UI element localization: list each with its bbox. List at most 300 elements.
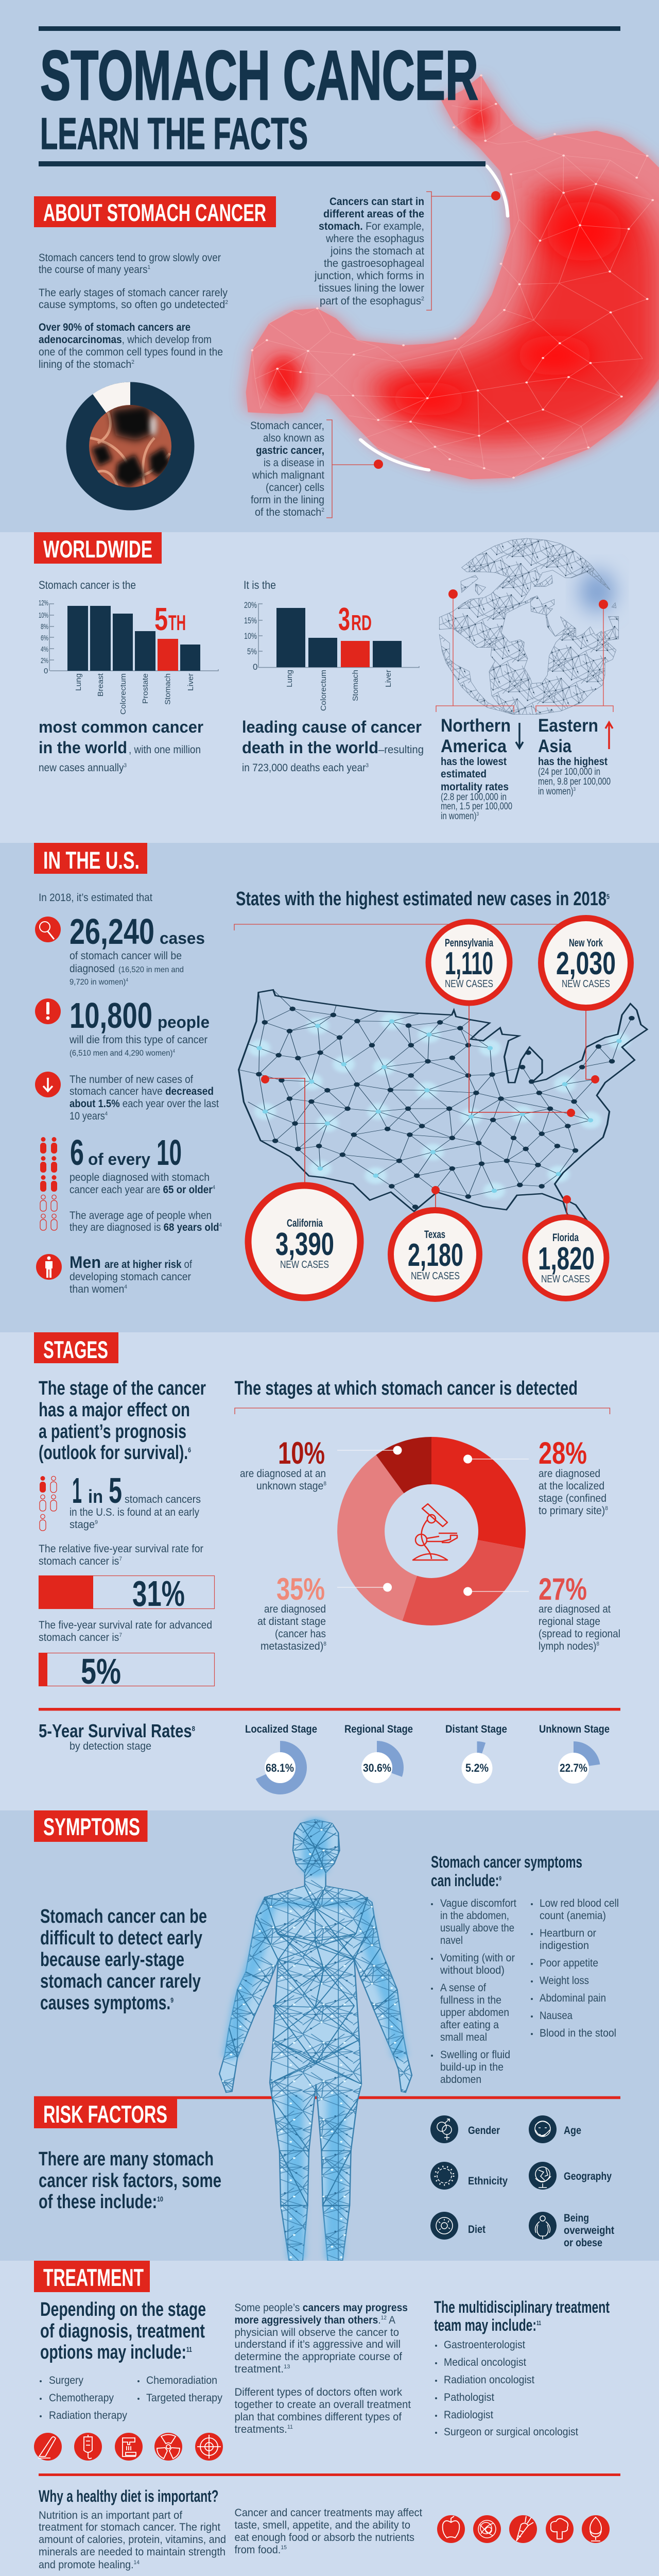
label: 10% unknown stage: are diagnosed at an — [240, 1468, 326, 1480]
callout: cancers can start in different areas: joins the stomach at — [330, 245, 424, 257]
callout: cancers can start in different areas: 2 — [421, 296, 424, 302]
heading: risk factors — [34, 2096, 177, 2128]
text: treatments affect eating — [235, 2507, 422, 2556]
stat: men at higher risk: developing stomach cancer — [70, 1271, 191, 1283]
chart: most common cancers: TH — [168, 611, 186, 635]
text: nutrition importance: 14 — [134, 2560, 140, 2566]
callout: Pennsylvania: NEW CASES — [445, 978, 493, 990]
callout: California: 3,390 — [275, 1227, 334, 1262]
list: symptoms column 1: Vomiting (with or — [440, 1952, 515, 1964]
text: aggressive cancers: 11 — [287, 2424, 293, 2430]
text block: intro: 2 — [131, 359, 134, 365]
map: network of the United States — [239, 990, 647, 1219]
icon: geography: Geography — [564, 2171, 612, 2182]
stat: cases decreased: 4 — [105, 1111, 108, 1117]
heading: treatment — [34, 2261, 150, 2292]
heading: in the U.S. — [34, 843, 147, 874]
text block: northern america: in women) — [441, 811, 486, 822]
text block: intro: one of the common cell types found in the — [39, 346, 223, 358]
icon: ethnicity — [430, 2162, 508, 2190]
chart: unknown 22.7% — [539, 1723, 610, 1789]
label: 28% localized: 8 — [605, 1505, 608, 1512]
stat: 1 in 5: in — [88, 1486, 103, 1507]
chart: regional 30.6%: Regional Stage — [344, 1723, 413, 1735]
list: symptoms column 2: Nausea — [540, 2010, 573, 2022]
text block: leading cause of death: 3 — [366, 762, 369, 769]
text: treatments affect eating: from food. — [235, 2544, 283, 2556]
text block: northern america: America — [441, 736, 507, 756]
list: symptoms column 1: navel — [440, 1935, 463, 1946]
chart: detection stage donut — [337, 1437, 529, 1625]
heading: symptoms list: 9 — [499, 1875, 501, 1882]
text block: intro: Over 90% of stomach cancers are — [39, 321, 190, 333]
callout: Florida — [525, 1217, 606, 1298]
chart: leading causes of cancer death: It is the — [244, 579, 276, 591]
stat: cases decreased: stomach cancer have decreased — [70, 1086, 214, 1097]
heading: treatment: TREATMENT — [43, 2264, 144, 2291]
heading: 5-year survival rates: 5-Year Survival Rates — [39, 1720, 227, 1741]
text block: northern america: Northern — [441, 716, 511, 736]
icon: geography — [529, 2162, 612, 2190]
text: aggressive cancers — [235, 2302, 411, 2435]
label: 27% regional: are diagnosed at — [539, 1603, 611, 1615]
stat: 26,240 cases: cases — [160, 929, 205, 947]
stat: men at higher risk: Men — [70, 1253, 101, 1272]
label: 28% localized — [539, 1436, 608, 1517]
callout: New York: New York — [569, 937, 603, 949]
callout: cancers can start in different areas: tissues lining the lower — [319, 282, 424, 294]
list: treatment team: 11 — [536, 2319, 541, 2327]
chart: leading causes of cancer death — [244, 579, 419, 711]
icon: microscope — [413, 1504, 457, 1560]
top rule — [39, 26, 620, 31]
icon: diet: Diet — [468, 2224, 485, 2235]
chart: 90% adenocarcinoma donut with tissue — [66, 382, 195, 510]
text: risk factors intro: 10 — [157, 2195, 163, 2203]
decorative bracket — [235, 1408, 610, 1414]
stat: 6 of every 10 with people icons: cancer each year are 65 or older — [70, 1184, 218, 1196]
text block: most common cancer: 3 — [124, 762, 127, 769]
chart: most common cancers: Breast — [96, 673, 105, 697]
list: symptoms column 1: without blood) — [440, 1964, 505, 1976]
callout: cancers can start in different areas: Cancers can start in — [330, 196, 424, 208]
callout: Pennsylvania: 1,110 — [445, 946, 493, 981]
text: treatment options — [40, 2299, 206, 2363]
icon: diet — [430, 2212, 485, 2240]
chart: most common cancers: Stomach cancer is the — [39, 579, 136, 591]
list: symptoms column 1: in the abdomen, — [440, 1910, 509, 1922]
text block: eastern asia: men, 9.8 per 100,000 — [538, 776, 611, 787]
chart: most common cancers: 6% — [41, 634, 48, 642]
stat: men at higher risk — [36, 1253, 192, 1295]
text block: eastern asia: (24 per 100,000 in — [538, 767, 600, 777]
text block: intro: adenocarcinomas, which develop from — [39, 334, 212, 346]
label: 28% localized: to primary site) — [539, 1505, 610, 1517]
heading: stages: STAGES — [43, 1336, 108, 1363]
icon: age — [529, 2115, 581, 2143]
heading: worldwide: WORLDWIDE — [43, 535, 152, 563]
callout: Texas: Texas — [424, 1229, 445, 1241]
stat: men at higher risk: than women — [70, 1283, 128, 1295]
icon: broccoli — [546, 2515, 574, 2543]
text block: northern america — [441, 716, 512, 822]
label: 27% regional: lymph nodes) — [539, 1640, 603, 1652]
stat: 6 of every 10 with people icons: 10 — [157, 1132, 182, 1173]
subtitle: LEARN THE FACTS — [40, 109, 308, 159]
text block: intro — [39, 252, 228, 370]
list: treatment team: Medical oncologist — [444, 2357, 526, 2368]
heading: symptoms: SYMPTOMS — [43, 1813, 140, 1840]
chart: leading causes of cancer death: Liver — [384, 670, 393, 687]
label: 35% distant — [257, 1572, 326, 1652]
text: treatment options: of diagnosis, treatment — [40, 2320, 205, 2342]
heading: symptoms list: Stomach cancer symptoms — [431, 1853, 582, 1871]
chart: distant 5.2%: 5.2% — [465, 1761, 489, 1774]
chart: most common cancers: 4% — [41, 645, 48, 654]
text: aggressive cancers: Some people’s cancers may progress — [235, 2302, 408, 2314]
callout: Texas: NEW CASES — [411, 1270, 460, 1282]
text block: intro: lining of the stomach — [39, 359, 138, 370]
icon: being overweight: overweight — [564, 2225, 614, 2236]
text block: leading cause of death: –resulting — [378, 744, 424, 756]
list: treatment options: Targeted therapy — [146, 2392, 222, 2404]
stat: men at higher risk: are at higher risk of — [105, 1259, 192, 1270]
list: symptoms column 2 — [531, 1897, 619, 2039]
stat: 5% advanced survival: The five-year survival rate for advanced — [39, 1619, 212, 1631]
callout: gastric cancer definition: Stomach cancer, — [250, 420, 324, 432]
chart: leading causes of cancer death: 3 — [338, 602, 350, 637]
stat: 6 of every 10 with people icons: The average age of people when — [70, 1210, 212, 1222]
text block: intro: 1 — [148, 264, 150, 270]
text: nutrition importance: Nutrition is an important part of — [39, 2510, 182, 2521]
text: aggressive cancers: together to create an overall treatment — [235, 2399, 411, 2411]
text block: northern america: has the lowest — [441, 756, 507, 768]
chart: most common cancers: Stomach — [164, 673, 172, 705]
label: 28% localized: stage (confined — [539, 1493, 606, 1504]
text: stage effect on prognosis: 6 — [188, 1446, 191, 1454]
illustration: network globe — [436, 538, 619, 715]
chart: leading causes of cancer death: 0 — [253, 662, 257, 672]
text: treatment options: Depending on the stage — [40, 2299, 206, 2320]
text: difficult to detect: difficult to detect early — [40, 1927, 202, 1949]
list: symptoms column 1: small meal — [440, 2031, 487, 2043]
text: nutrition importance: amount of calories, protein, vitamins, and — [39, 2534, 226, 2546]
list: symptoms column 1: usually above the — [440, 1922, 514, 1934]
callout: gastric cancer definition — [250, 420, 383, 518]
text block: northern america: mortality rates — [441, 781, 509, 793]
stat: 1 in 5: 1 — [72, 1470, 82, 1511]
chart: leading causes of cancer death: 15% — [244, 616, 257, 625]
label: 27% regional: 27% — [539, 1572, 587, 1606]
text: stage effect on prognosis: (outlook for survival). — [39, 1442, 238, 1464]
illustration: glowing stomach — [246, 75, 659, 479]
chart: regional 30.6% — [344, 1723, 413, 1789]
text block: eastern asia: 3 — [574, 787, 576, 792]
chart: most common cancers: 8% — [41, 622, 48, 631]
panel: worldwide — [0, 532, 659, 843]
heading: in the U.S.: IN THE U.S. — [43, 846, 140, 874]
callout: California: California — [287, 1217, 323, 1229]
chart: leading causes of cancer death: Colorectum — [319, 670, 328, 711]
chart: most common cancers: 5 — [154, 602, 168, 637]
divider rule — [34, 2096, 620, 2099]
text block: leading cause of death — [242, 718, 424, 774]
stat: cases decreased: about 1.5% each year over the last — [70, 1098, 219, 1110]
stat: 31% five-year survival: The relative five-year survival rate for — [39, 1543, 203, 1555]
chart: most common cancers: Liver — [186, 673, 195, 691]
list: symptoms column 2: Low red blood cell — [540, 1897, 619, 1909]
chart: most common cancers: Prostate — [141, 673, 150, 704]
callout: gastric cancer definition: is a disease in — [264, 457, 324, 469]
icon: gender: Gender — [468, 2125, 500, 2137]
stat: 26,240 cases: 26,240 — [70, 911, 154, 952]
chart: most common cancers: 10% — [39, 611, 48, 620]
callout: New York: NEW CASES — [562, 978, 610, 990]
text block: eastern asia: Eastern — [538, 716, 598, 736]
stat: 6 of every 10 with people icons — [40, 1132, 222, 1233]
heading: about stomach cancer — [34, 196, 276, 227]
callout: gastric cancer definition: also known as — [263, 432, 324, 444]
text: aggressive cancers: treatment. — [235, 2363, 283, 2375]
text: stage effect on prognosis: a patient’s prognosis — [39, 1421, 186, 1443]
chart: leading causes of cancer death: 20% — [244, 600, 257, 610]
list: treatment team: team may include: — [434, 2316, 578, 2334]
text: difficult to detect: Stomach cancer can be — [40, 1906, 207, 1927]
stat: 5% advanced survival: 7 — [119, 1632, 122, 1638]
label: 28% localized: are diagnosed — [539, 1468, 600, 1480]
label: 10% unknown stage: 8 — [323, 1481, 326, 1487]
stat: men at higher risk: 4 — [124, 1284, 127, 1290]
text block: most common cancer: in the world — [39, 738, 127, 757]
callout: cancers can start in different areas: where the esophagus — [325, 233, 424, 245]
list: symptoms column 1: A sense of — [440, 1982, 486, 1994]
list: treatment team: Pathologist — [444, 2392, 494, 2403]
list: symptoms column 2: count (anemia) — [540, 1910, 606, 1922]
list: symptoms column 2: Poor appetite — [540, 1957, 598, 1969]
stat: 6 of every 10 with people icons: 4 — [213, 1184, 215, 1191]
callout: California: NEW CASES — [280, 1259, 329, 1270]
callout: Pennsylvania — [428, 922, 510, 1003]
list: symptoms column 1: upper abdomen — [440, 2007, 509, 2019]
lower rule — [39, 161, 485, 166]
text block: northern america: 3 — [477, 811, 479, 817]
text: treatments affect eating: Cancer and cancer treatments may affect — [235, 2507, 422, 2519]
text block: intro: 2 — [225, 299, 228, 306]
stat: 10,800 people: (6,510 men and 4,290 women) — [70, 1049, 182, 1058]
callout: Pennsylvania: Pennsylvania — [445, 937, 493, 949]
label: 35% distant: at distant stage — [257, 1616, 326, 1628]
heading: 5-year survival rates: by detection stage — [70, 1740, 151, 1752]
text: difficult to detect: causes symptoms. — [40, 1992, 215, 2014]
list: symptoms column 1: build-up in the — [440, 2061, 504, 2073]
text block: leading cause of death: in 723,000 deaths each year — [242, 762, 378, 774]
label: 10% unknown stage: unknown stage — [256, 1480, 329, 1492]
list: symptoms column 1: fullness in the — [440, 1994, 501, 2006]
text block: most common cancer: , with one million — [129, 744, 201, 756]
stat: 6 of every 10 with people icons: they are diagnosed is 68 years old — [70, 1222, 226, 1233]
text block: eastern asia: has the highest — [538, 756, 608, 768]
chart: most common cancers: 2% — [41, 656, 48, 665]
label: 28% localized: 28% — [539, 1436, 587, 1470]
label: 35% distant: are diagnosed — [264, 1603, 326, 1615]
heading: worldwide — [34, 532, 162, 564]
chart: most common cancers: 0 — [44, 667, 48, 675]
text: treatments affect eating: taste, smell, appetite, and the ability to — [235, 2519, 410, 2531]
list: symptoms column 1: Swelling or fluid — [440, 2049, 510, 2061]
arrow: highest rates up — [605, 722, 613, 749]
stat: 26,240 cases: diagnosed — [70, 963, 115, 975]
text block: intro: The early stages of stomach cancer rarely — [39, 287, 228, 299]
stat: 26,240 cases: of stomach cancer will be — [70, 950, 182, 962]
chart: leading causes of cancer death: 10% — [244, 631, 257, 641]
chart: most common cancers: Colorectum — [119, 673, 128, 715]
stat: 31% five-year survival: 7 — [119, 1556, 122, 1562]
callout: cancers can start in different areas — [314, 191, 500, 310]
divider rule — [39, 1708, 620, 1710]
stat: 1 in 5: stage — [70, 1519, 96, 1531]
heading: about stomach cancer: ABOUT STOMACH CANCER — [43, 199, 266, 226]
callout: gastric cancer definition: (cancer) cells — [266, 482, 324, 494]
callout: Florida: Florida — [552, 1232, 579, 1244]
callout: cancers can start in different areas: stomach. For example, — [319, 221, 424, 232]
text: difficult to detect: because early-stage — [40, 1949, 184, 1971]
icon: chemotherapy IV bag — [74, 2433, 102, 2461]
stat: 10,800 people: people — [158, 1013, 210, 1031]
callout: Texas: 2,180 — [408, 1238, 463, 1273]
callout: gastric cancer definition: of the stomach — [255, 506, 326, 518]
stat: 1 in 5: 5 — [109, 1470, 122, 1511]
text: risk factors intro — [39, 2148, 221, 2213]
chart: distant 5.2%: Distant Stage — [445, 1723, 507, 1735]
list: symptoms column 2: Heartburn or — [540, 1927, 596, 1939]
list: treatment options — [40, 2375, 222, 2421]
text: difficult to detect: stomach cancer rarely — [40, 1971, 201, 1992]
callout: cancers can start in different areas: different areas of the — [323, 208, 424, 220]
heading: 5-year survival rates: 8 — [192, 1724, 195, 1733]
stat: 10,800 people: 4 — [172, 1048, 175, 1054]
callout: New York — [541, 918, 631, 1008]
stat: cases decreased: 10 years — [70, 1110, 111, 1122]
label: 35% distant: 8 — [323, 1641, 326, 1647]
list: treatment options: Radiation therapy — [49, 2410, 127, 2421]
list: symptoms column 2: Weight loss — [540, 1975, 589, 1987]
text: aggressive cancers: 13 — [284, 2364, 290, 2370]
icon: being overweight: or obese — [564, 2237, 602, 2249]
stat: 1 in 5: in the U.S. is found at an early — [70, 1506, 199, 1518]
icon: gender — [430, 2115, 500, 2143]
list: symptoms column 1: abdomen — [440, 2074, 481, 2086]
callout: gastric cancer definition: which malignant — [252, 469, 324, 481]
text block: northern america: estimated — [441, 768, 487, 780]
callout: Texas — [391, 1210, 479, 1299]
label: 27% regional: 8 — [597, 1641, 599, 1647]
chart: most common cancers: 12% — [39, 599, 48, 607]
text: nutrition importance: treatment for stomach cancer. The right — [39, 2521, 220, 2533]
callout: Florida: NEW CASES — [541, 1274, 590, 1285]
callout: Florida: 1,820 — [538, 1241, 595, 1277]
text: stage effect on prognosis — [39, 1378, 206, 1464]
list: treatment team: Radiologist — [444, 2409, 493, 2421]
text block: most common cancer: new cases annually — [39, 762, 133, 774]
text: aggressive cancers: Different types of doctors often work — [235, 2386, 402, 2398]
heading: states with highest new cases: 5 — [606, 892, 610, 901]
text block: most common cancer: most common cancer — [39, 718, 203, 736]
text: risk factors intro: There are many stomach — [39, 2148, 214, 2170]
stat: 31% five-year survival: stomach cancer is — [39, 1555, 126, 1567]
list: symptoms column 1 — [431, 1897, 516, 2086]
list: treatment team: Surgeon or surgical oncologist — [444, 2426, 578, 2438]
icon: ethnicity: Ethnicity — [468, 2175, 508, 2187]
stat: 26,240 cases: (16,520 in men and — [118, 965, 184, 974]
panel: in the U.S. — [0, 843, 659, 1332]
illustration: network human body — [219, 1820, 412, 2261]
text block: leading cause of death: death in the world — [242, 738, 378, 757]
stat: 6 of every 10 with people icons: 4 — [219, 1222, 222, 1228]
text: aggressive cancers: understand if it’s aggressive and will — [235, 2338, 401, 2350]
heading: healthy diet: Why a healthy diet is important? — [39, 2487, 218, 2505]
label: 35% distant: 35% — [276, 1572, 325, 1606]
text block: leading cause of death: leading cause of cancer — [242, 718, 422, 736]
divider rule — [39, 2473, 620, 2476]
icon: apple — [437, 2515, 465, 2543]
panel: hero and about stomach cancer — [0, 0, 659, 532]
label: 27% regional: regional stage — [539, 1616, 600, 1628]
stat: 5% advanced survival: 5% — [81, 1651, 121, 1691]
text: aggressive cancers: treatments. — [235, 2424, 289, 2435]
text: risk factors intro: of these include: — [39, 2191, 194, 2213]
chart: most common cancers — [39, 579, 218, 715]
icon: egg — [582, 2515, 610, 2543]
chart: localized 68.1% — [245, 1723, 317, 1789]
stat: 1 in 5: 9 — [95, 1519, 98, 1526]
chart: localized 68.1%: 68.1% — [266, 1761, 294, 1774]
list: symptoms column 2: Blood in the stool — [540, 2027, 616, 2039]
chart: leading causes of cancer death: RD — [351, 611, 372, 635]
chart: distant 5.2% — [445, 1723, 507, 1789]
text: treatments affect eating: eat enough food or absorb the nutrients — [235, 2532, 414, 2544]
chart: unknown 22.7%: 22.7% — [560, 1761, 587, 1774]
text: difficult to detect: 9 — [170, 1996, 174, 2004]
list: symptoms column 2: indigestion — [540, 1940, 589, 1952]
callout: California — [248, 1185, 360, 1298]
chart: localized 68.1%: Localized Stage — [245, 1723, 317, 1735]
chart: unknown 22.7%: Unknown Stage — [539, 1723, 610, 1735]
stat: 1 in 5 — [40, 1470, 201, 1531]
stat: 31% five-year survival: 31% — [132, 1573, 185, 1614]
text block: most common cancer — [39, 718, 203, 774]
text: aggressive cancers: 12 — [381, 2315, 387, 2321]
icon: radiation machine — [115, 2433, 143, 2461]
text: nutrition importance: minerals are needed to maintain strength — [39, 2546, 226, 2558]
list: treatment team: Radiation oncologist — [444, 2374, 534, 2386]
text: stage effect on prognosis: has a major effect on — [39, 1399, 190, 1421]
callout: gastric cancer definition: form in the lining — [251, 494, 324, 506]
chart: leading causes of cancer death: Lung — [285, 670, 294, 687]
icon: age: Age — [564, 2125, 581, 2137]
icon: surgery scalpel — [34, 2433, 62, 2461]
icon: carrot — [509, 2515, 537, 2543]
text: treatment options: 11 — [186, 2345, 192, 2353]
callout: gastric cancer definition: gastric cancer, — [256, 445, 324, 456]
icon: pasta — [473, 2515, 501, 2543]
text: difficult to detect — [40, 1906, 207, 2014]
stat: 31% five-year survival — [39, 1543, 214, 1614]
label: 35% distant: (cancer has — [275, 1628, 326, 1640]
text block: intro: Stomach cancers tend to grow slowly over — [39, 252, 221, 264]
stat: 26,240 cases — [35, 911, 205, 987]
heading: 5-year survival rates — [39, 1720, 195, 1752]
heading: symptoms — [34, 1810, 147, 1842]
